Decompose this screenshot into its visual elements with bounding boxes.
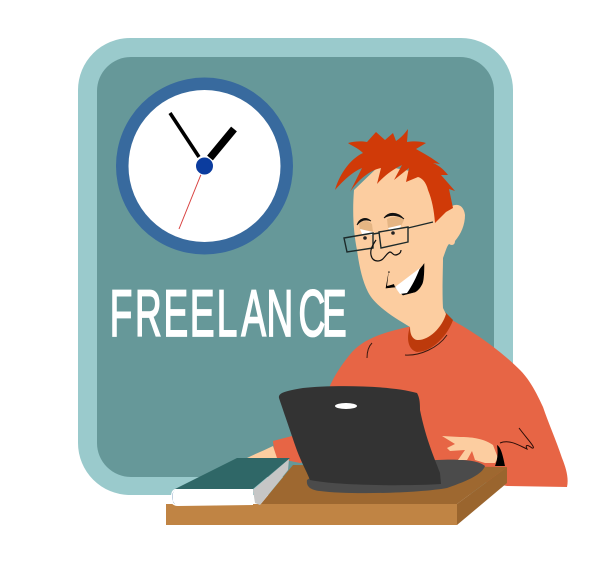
pages <box>171 488 253 506</box>
second hand <box>179 172 202 229</box>
hour hand <box>210 129 234 158</box>
page block <box>253 459 289 505</box>
book <box>171 458 290 506</box>
teeth <box>395 268 420 294</box>
cuff <box>495 445 505 466</box>
collar <box>408 312 453 352</box>
panel: outer teal frame <box>78 38 513 495</box>
title: FREELANCE <box>110 278 347 351</box>
laptop logo <box>335 403 357 409</box>
table top <box>260 465 507 505</box>
eyes <box>363 236 367 240</box>
laptop <box>279 386 441 485</box>
eye shadows <box>359 217 404 232</box>
sweater fold lines <box>367 335 447 358</box>
mouth interior skin <box>387 265 423 286</box>
mouth <box>386 264 424 295</box>
hair <box>335 129 455 223</box>
sweater <box>273 319 568 487</box>
right hand <box>442 428 533 466</box>
mouse pad <box>307 460 485 493</box>
nose <box>371 240 401 261</box>
eyebrows <box>357 213 404 225</box>
left hand <box>247 446 277 461</box>
table <box>166 465 507 525</box>
book spine edge <box>172 490 175 504</box>
figure: freelancer <box>273 129 568 487</box>
table front <box>166 504 457 525</box>
minute hand <box>170 113 199 157</box>
face <box>353 165 465 340</box>
left sleeve <box>273 395 345 463</box>
sleeve wrinkle <box>500 428 533 449</box>
table side <box>457 467 507 525</box>
icon: wall clock <box>116 78 293 254</box>
clock centre <box>196 157 214 175</box>
panel: inner teal background <box>97 57 494 477</box>
glasses <box>344 222 433 252</box>
eye highlights <box>360 225 401 235</box>
book cover <box>175 458 290 489</box>
